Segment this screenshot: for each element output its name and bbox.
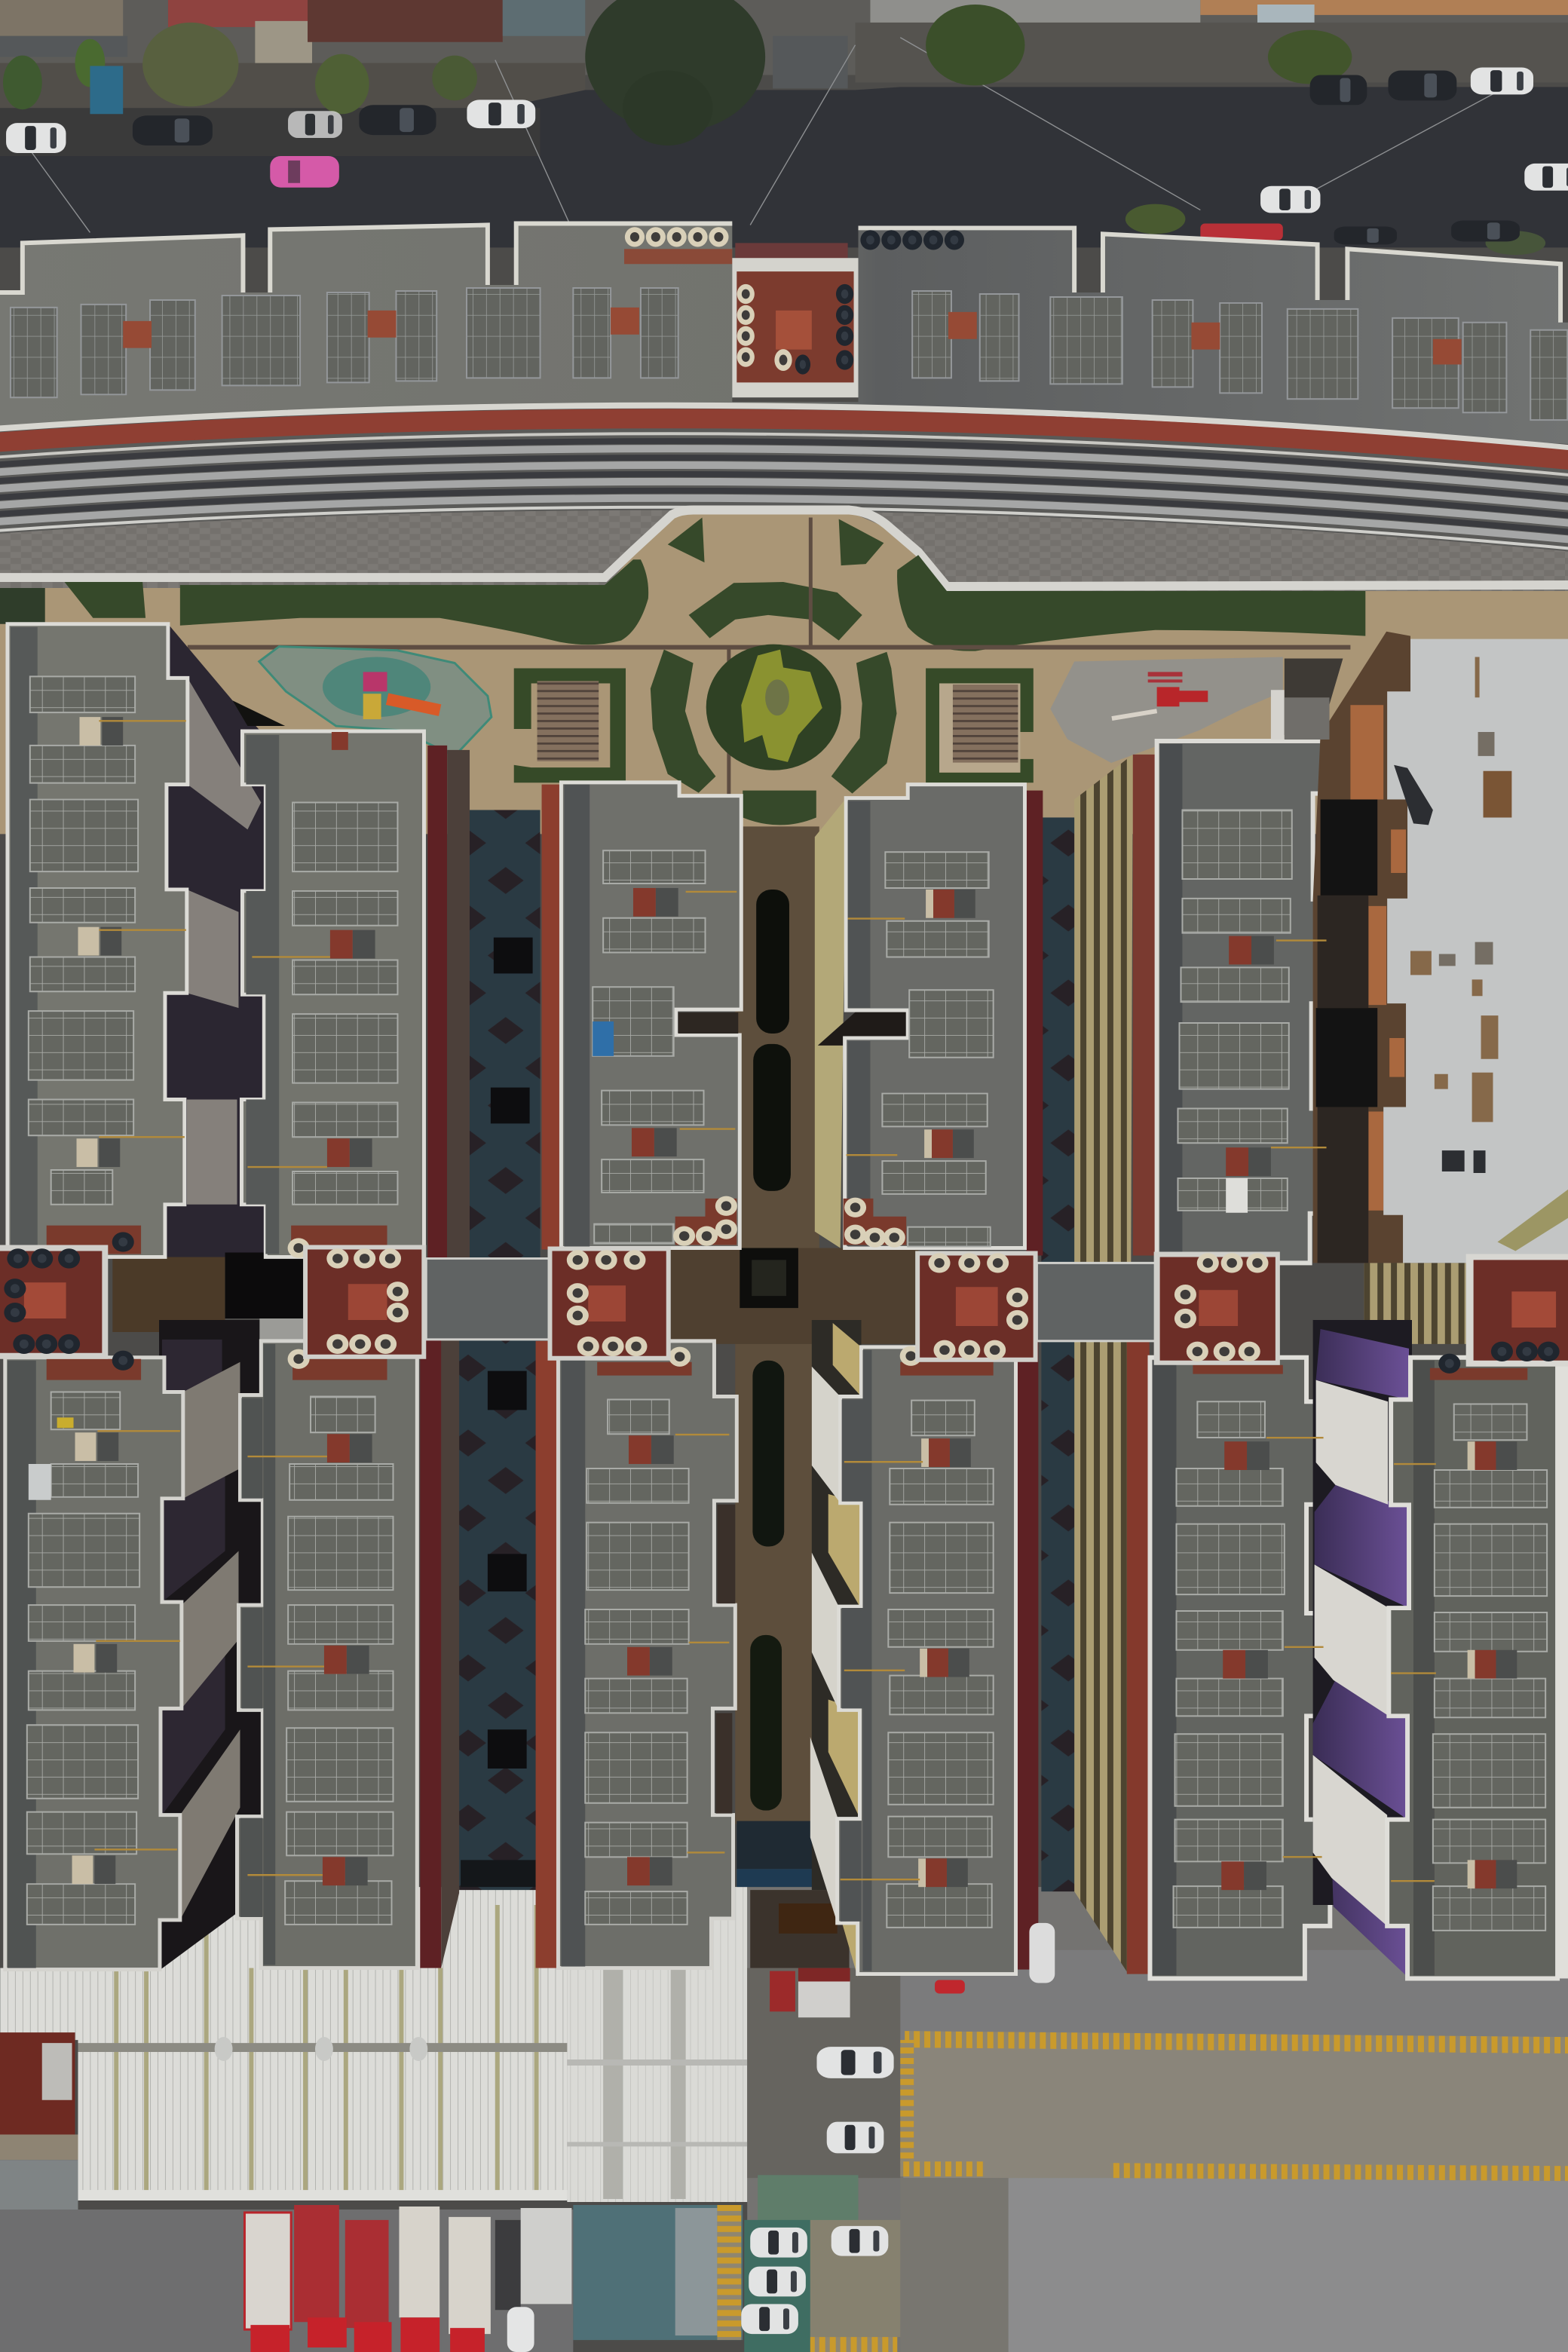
right planter and pergola (926, 668, 1034, 782)
red walls (420, 746, 1157, 1974)
block A upper roof (8, 624, 188, 1257)
street cars (6, 68, 1568, 261)
block D upper roof (845, 785, 1024, 1248)
block C lower roof (558, 1341, 737, 1968)
left dark courtyard (459, 810, 541, 1890)
block F lower side walls (1313, 1320, 1412, 1976)
block F white upper roof (1383, 639, 1568, 1263)
block E upper roof (1157, 741, 1340, 1263)
block C upper roof (561, 782, 741, 1248)
rooftop access boxes (29, 717, 1517, 1890)
central red roof tower (732, 258, 859, 397)
rooftop racks upper blocks (29, 676, 1292, 1247)
block C stair walls (715, 1505, 735, 1814)
blue-green loading pad (573, 2205, 743, 2340)
yellow facade behind tower F (1364, 1263, 1466, 1344)
block F lower roof (1387, 1358, 1568, 1979)
red tower B (303, 1245, 426, 1359)
orange roof pipes (94, 721, 1436, 1881)
red tower F (1466, 1254, 1568, 1367)
central round garden bed (706, 645, 841, 770)
tall yellow wall (1074, 755, 1133, 1974)
block B upper roof (241, 731, 424, 1257)
left planter and pergola (514, 668, 626, 782)
block D lower side walls (810, 1320, 862, 1977)
concrete bridges (426, 1258, 1157, 1341)
block D lower roof (838, 1347, 1016, 1974)
crenellated upper roof strip (0, 223, 1568, 444)
garden far-left hedge patch (0, 588, 45, 624)
green parking bay (744, 2175, 900, 2352)
block B lower roof (237, 1341, 417, 1968)
paved terrace band (0, 510, 1568, 594)
delivery van and cars near building (770, 1923, 1055, 2017)
red roof bands and fans near towers (47, 1196, 1527, 1380)
right dark courtyard (1041, 817, 1077, 1891)
lower left red service block (0, 2032, 78, 2213)
red tower A (0, 1245, 108, 1359)
curved striped roof (0, 404, 1568, 600)
delivery trucks (244, 2205, 571, 2352)
central brown courtyard (671, 826, 918, 1968)
terrace white edge (0, 510, 1568, 586)
lower left gravel yard (0, 2210, 573, 2352)
small red roof boxes on upper strip (123, 308, 1462, 365)
playground left (259, 647, 492, 756)
rooftop racks lower blocks (27, 1392, 1547, 1931)
parking ground right (747, 1887, 1568, 2352)
red tower D (915, 1251, 1038, 1362)
garden ground (0, 513, 1568, 834)
playground right (1050, 657, 1283, 763)
block D upper walls (815, 798, 908, 1248)
garden dividing paths (188, 517, 1350, 798)
trees along the street (3, 0, 1545, 255)
block A lower roof (5, 1358, 183, 1970)
block A side walls (112, 624, 308, 1970)
yellow hazard stripes (900, 2031, 1568, 2181)
red tower C (548, 1247, 671, 1361)
parked white cars (741, 2047, 894, 2334)
rooftop racks on upper strip (11, 288, 1568, 420)
garden hedges (65, 517, 1365, 825)
top street block (0, 0, 1568, 247)
warehouse white corrugated roof (0, 1887, 747, 2202)
red tower E (1154, 1251, 1280, 1365)
block E lower roof (1150, 1358, 1332, 1979)
block F brick and construction edge (1271, 632, 1410, 1263)
